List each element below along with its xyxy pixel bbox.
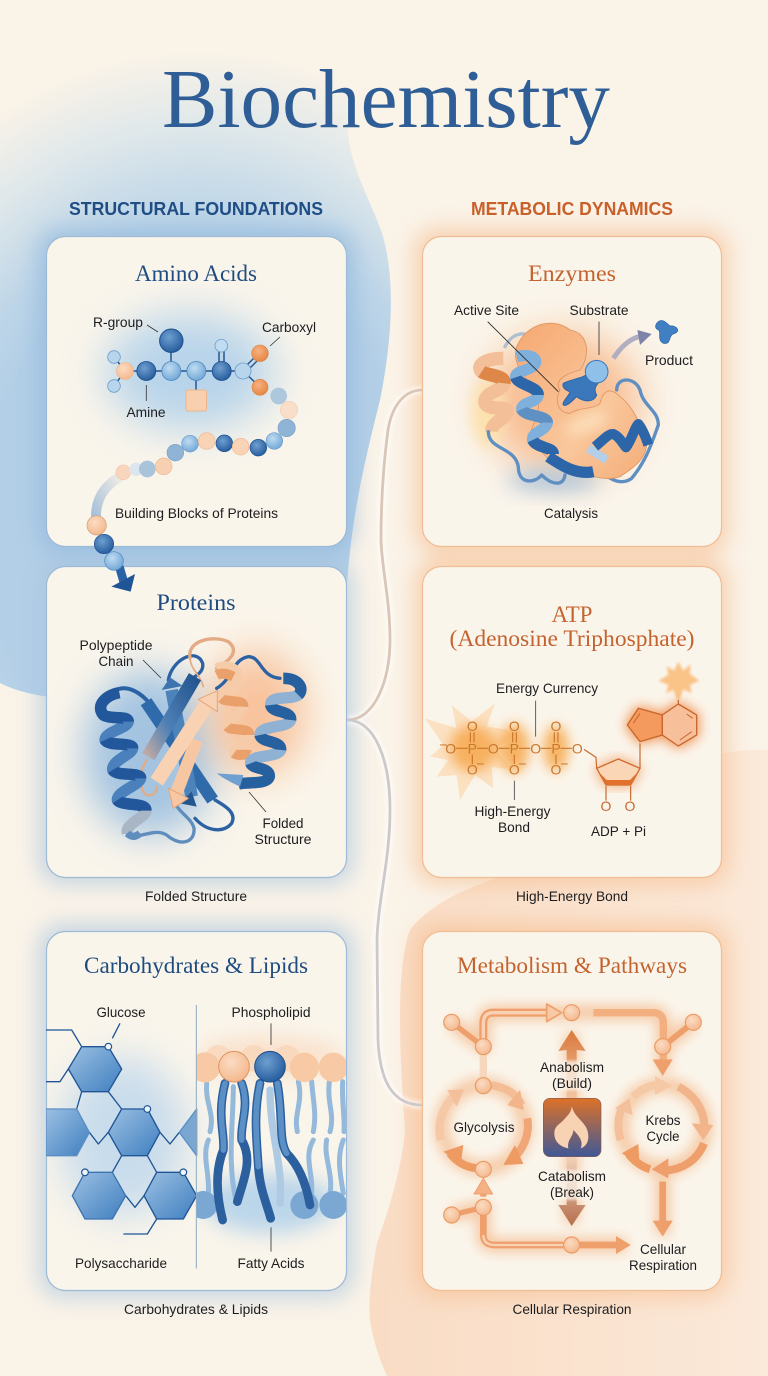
- phosphate text: O: [551, 761, 562, 777]
- panel: amino acids: [46, 236, 346, 546]
- panel: metabolism and pathways: [422, 932, 722, 1290]
- label: phospholipid: Phospholipid: [232, 1004, 310, 1020]
- substrate: [563, 373, 602, 405]
- thin loops: [115, 688, 147, 700]
- label: carboxyl: Carboxyl: [262, 319, 316, 335]
- phosphate text: −: [560, 755, 568, 771]
- phosphate text: O: [601, 798, 612, 814]
- phosphate text: −: [439, 736, 447, 752]
- caption: building blocks: Building Blocks of Proteins: [115, 505, 278, 521]
- nodes: [444, 1005, 701, 1253]
- label: catabolism: [538, 1168, 606, 1200]
- protein ribbon diagram: [83, 639, 307, 842]
- label: carboxyl: [262, 319, 316, 346]
- label: energy currency: Energy Currency: [496, 680, 598, 696]
- label: anabolism: (Build): [552, 1075, 592, 1091]
- glucose polysaccharide: [46, 1023, 197, 1234]
- arrow to product: [613, 336, 643, 358]
- text halo: [538, 1061, 605, 1200]
- label: polysaccharide: Polysaccharide: [75, 1255, 167, 1271]
- label: krebs cycle: Cycle: [646, 1128, 680, 1144]
- phosphate text: O: [467, 718, 478, 734]
- glycolysis cycle: [439, 1085, 528, 1168]
- krebs cycle: [618, 1084, 704, 1171]
- panel: atp: [422, 566, 722, 878]
- heading: proteins: Proteins: [156, 590, 236, 616]
- title: Biochemistry: [162, 53, 610, 146]
- caption: carbohydrates and lipids: Carbohydrates & Lipids: [124, 1301, 268, 1317]
- enzyme body: [516, 323, 647, 479]
- amino glow: [105, 314, 275, 430]
- phosphate text: [439, 718, 636, 814]
- phosphate text: O: [625, 798, 636, 814]
- label: cellular respiration: Cellular: [640, 1241, 686, 1257]
- label: polypeptide chain: [80, 637, 161, 678]
- enzyme illustration: [473, 320, 678, 492]
- phosphate text: O: [467, 761, 478, 777]
- starburst: [425, 703, 520, 800]
- phosphate text: P: [468, 740, 477, 756]
- peach helix: [217, 666, 249, 755]
- central arrows: [558, 1030, 586, 1100]
- heading: structural foundations: STRUCTURAL FOUNDATIONS: [69, 198, 323, 219]
- label: anabolism: [540, 1059, 604, 1091]
- bottom pathway: [483, 1207, 563, 1245]
- leader lines: [488, 322, 558, 392]
- label: r-group: R-group: [93, 314, 143, 330]
- label: high-energy bond: High-Energy: [474, 803, 550, 819]
- blue strands back: [146, 690, 213, 800]
- right helix: [238, 678, 301, 784]
- label: polypeptide chain: Polypeptide: [80, 637, 153, 653]
- panel halos: [38, 228, 729, 1298]
- panel: proteins: [46, 566, 346, 878]
- icon: flame box: [543, 1098, 601, 1157]
- label: folded structure: Folded: [262, 815, 304, 831]
- label: product: Product: [645, 352, 693, 368]
- label: glucose: Glucose: [96, 1004, 146, 1020]
- caption: catalysis: Catalysis: [544, 505, 598, 521]
- caption: high-energy bond: High-Energy Bond: [516, 888, 628, 904]
- rings: [597, 759, 640, 785]
- label: high-energy bond: [474, 803, 550, 835]
- phosphate text: −: [518, 755, 526, 771]
- phosphate text: O: [530, 740, 541, 756]
- label: folded structure: [249, 792, 312, 847]
- left helix: [101, 693, 146, 836]
- phospholipid membrane: [189, 1037, 348, 1233]
- heading: metabolic dynamics: METABOLIC DYNAMICS: [471, 198, 673, 219]
- heading: metabolism and pathways: Metabolism & Pathways: [457, 953, 687, 979]
- heading: atp: (Adenosine Triphosphate): [450, 626, 694, 652]
- label: catabolism: Catabolism: [538, 1168, 606, 1184]
- label: cellular respiration: Respiration: [629, 1257, 697, 1273]
- phosphate text: P: [551, 740, 561, 756]
- heading: enzymes: Enzymes: [528, 261, 616, 287]
- label: krebs cycle: Krebs: [646, 1112, 680, 1128]
- top pathway: [483, 1013, 553, 1047]
- arrow: chain into proteins: [87, 516, 135, 592]
- label: krebs cycle: [646, 1112, 680, 1144]
- phosphate text: O: [572, 740, 583, 756]
- panel: carbohydrates and lipids: [46, 932, 348, 1290]
- heading: atp: ATP: [552, 602, 592, 628]
- metabolic pathway diagram: [439, 1004, 713, 1254]
- caption: cellular respiration: Cellular Respiration: [512, 1301, 632, 1317]
- phosphate text: O: [551, 718, 562, 734]
- pathway glow: [442, 1013, 705, 1245]
- bead chain: [96, 388, 298, 520]
- orange ribbon: [480, 358, 507, 432]
- phosphate text: O: [509, 718, 520, 734]
- front strands: [148, 677, 197, 797]
- label: amine: [126, 385, 166, 420]
- atp molecule: [425, 662, 699, 814]
- label: polypeptide chain: Chain: [98, 653, 134, 669]
- label: amine: Amine: [126, 404, 166, 420]
- label: adp + pi: ADP + Pi: [591, 823, 646, 839]
- caption: folded structure: Folded Structure: [145, 888, 247, 904]
- connector lines between panels: [347, 390, 422, 1105]
- label: substrate: Substrate: [570, 302, 629, 318]
- glows: [627, 704, 697, 746]
- panel: enzymes: [422, 236, 722, 546]
- label: active site: Active Site: [454, 302, 519, 318]
- label: folded structure: Structure: [254, 831, 312, 847]
- label: anabolism: Anabolism: [540, 1059, 604, 1075]
- phosphate text: O: [488, 740, 499, 756]
- phosphate text: O: [445, 740, 456, 756]
- phosphate text: −: [476, 755, 484, 771]
- heading: amino acids: Amino Acids: [135, 261, 257, 287]
- label: glycolysis: Glycolysis: [454, 1119, 514, 1135]
- heading: atp: [450, 602, 694, 652]
- product: [656, 320, 678, 344]
- heading: carbohydrates and lipids: Carbohydrates & Lipids: [84, 953, 308, 979]
- label: catabolism: (Break): [550, 1184, 594, 1200]
- molecule: amino acid backbone: [108, 329, 268, 411]
- label: cellular respiration: [629, 1241, 697, 1273]
- thin loop: [488, 334, 658, 483]
- label: high-energy bond: Bond: [498, 819, 530, 835]
- label: fatty acids: Fatty Acids: [238, 1255, 304, 1271]
- label: r-group: [93, 314, 158, 332]
- blue helix: [516, 356, 648, 472]
- phosphate text: O: [509, 761, 520, 777]
- phosphate text: P: [510, 740, 519, 756]
